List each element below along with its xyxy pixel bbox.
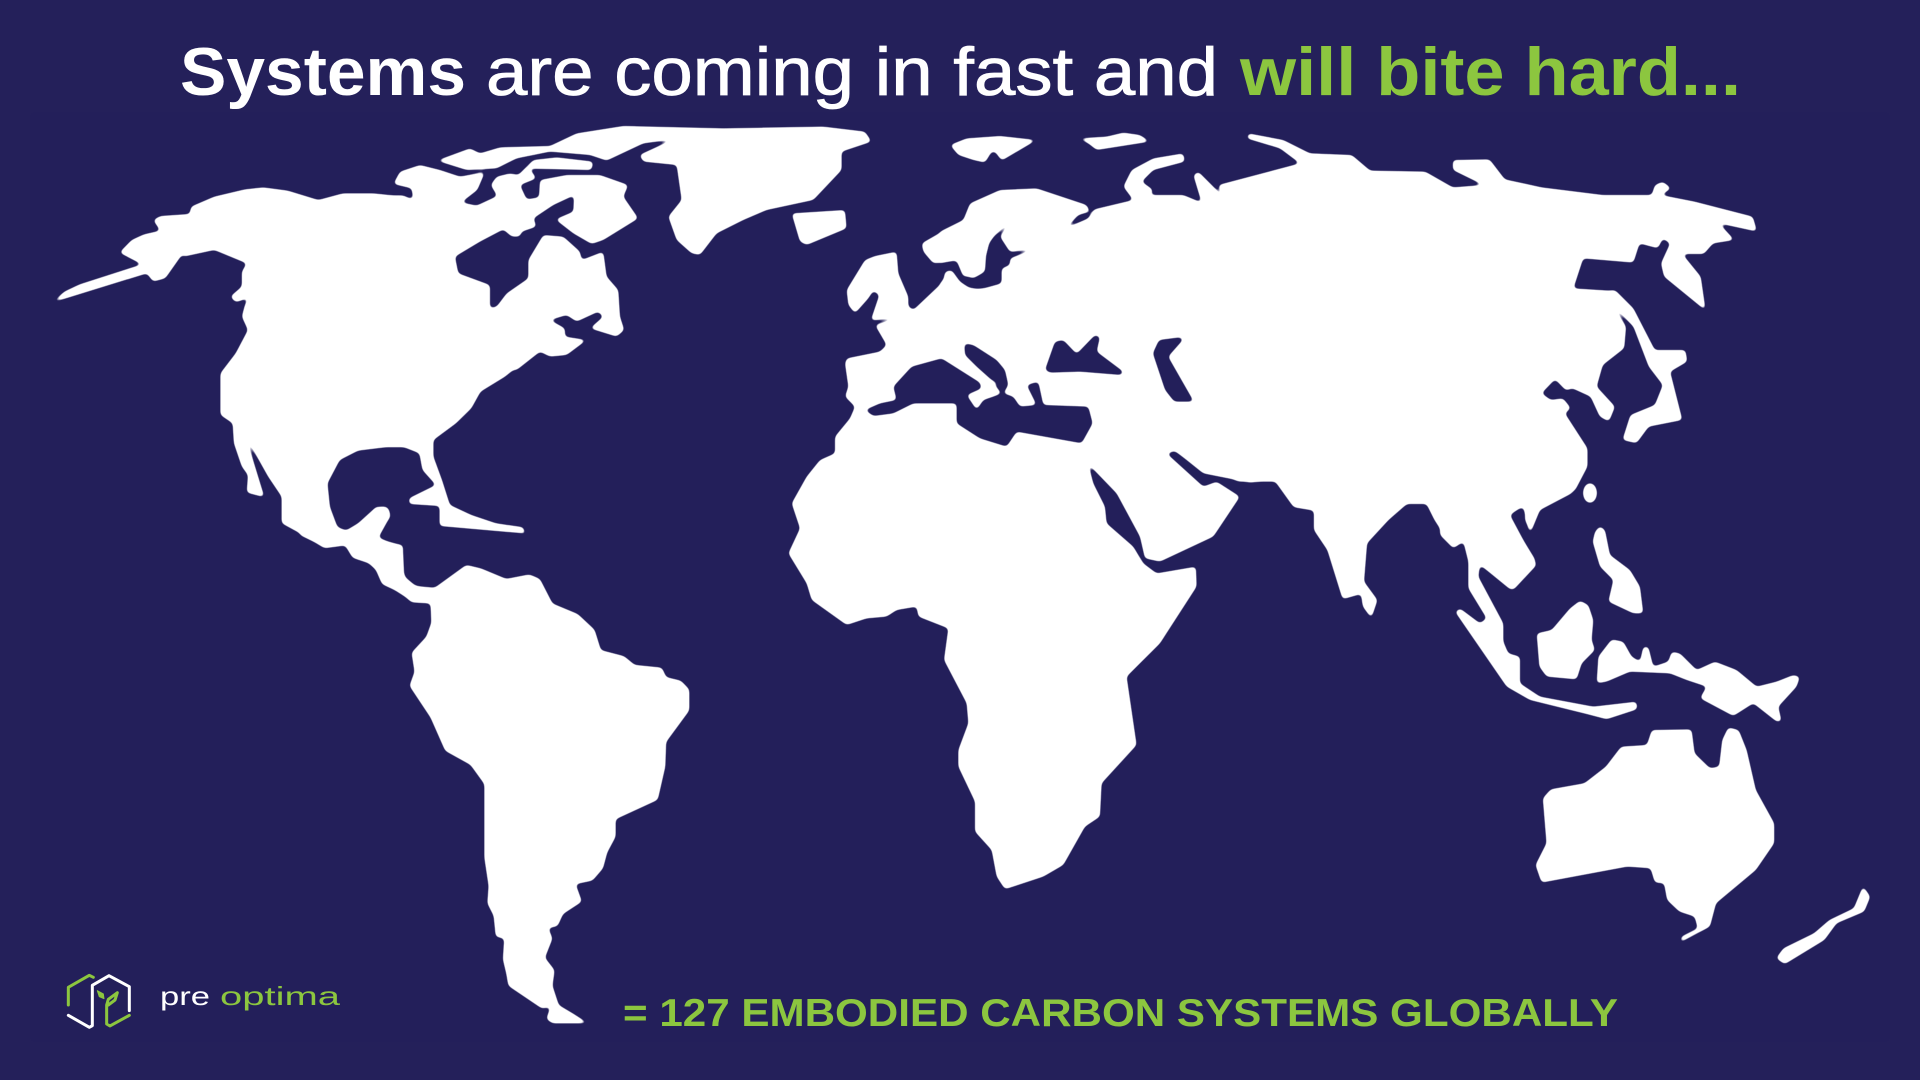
logo: preoptima: [68, 975, 341, 1027]
island: Iceland: [792, 210, 847, 245]
continent: Africa and Arabia: [788, 440, 1270, 889]
island: Philippines: [1593, 526, 1643, 613]
title: will bite hard...: [1239, 34, 1741, 110]
island: Sulawesi and New Guinea: [1597, 639, 1800, 722]
continent: South America: [300, 500, 689, 1023]
caption: 127 embodied carbon systems: = 127 EMBODIED CARBON SYSTEMS GLOBALLY: [623, 992, 1618, 1035]
continent: Greenland and Ellesmere: [437, 126, 872, 255]
island: Svalbard: [950, 136, 1037, 163]
logo wordmark: pre: [160, 981, 210, 1011]
island: New Zealand: [1776, 886, 1870, 964]
icon: house and leaf: [68, 975, 129, 1027]
logo wordmark: optima: [220, 981, 341, 1011]
sea: Mediterranean: [865, 343, 1093, 447]
island: Taiwan: [1583, 483, 1597, 503]
title: are coming in fast and: [486, 34, 1218, 110]
sea: Black Sea: [1045, 335, 1123, 375]
island: Franz Josef Land: [1078, 133, 1150, 150]
continent: North America: [52, 157, 638, 600]
title: Systems: [180, 34, 466, 110]
island: Borneo: [1537, 601, 1595, 679]
continent: Eurasia: [835, 133, 1757, 719]
sea: Caspian: [1153, 337, 1194, 402]
continent: Australia: [1535, 727, 1774, 943]
